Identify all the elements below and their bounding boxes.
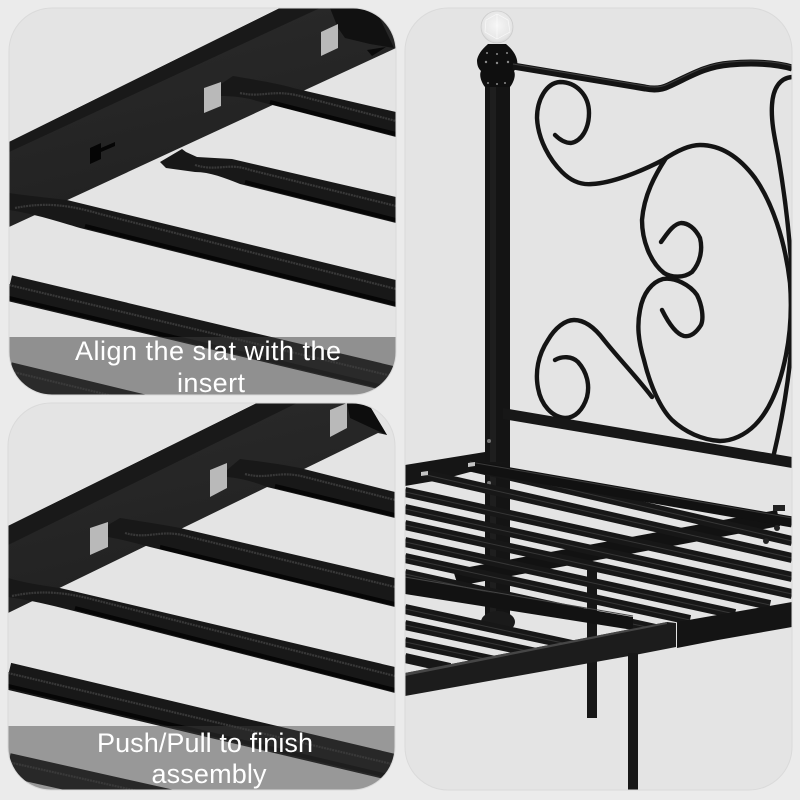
slat: lower long: [9, 285, 396, 390]
rear side rail: [470, 462, 792, 522]
slat: upper inserted: [221, 76, 396, 137]
finial knob: [477, 44, 517, 87]
T-shaped slot: [90, 142, 115, 164]
panel outline: [405, 8, 792, 790]
scroll: lower left: [537, 320, 652, 418]
slat: middle long: [9, 193, 396, 307]
scroll: upper inner: [642, 158, 701, 277]
caption: align the slat: insert: [177, 368, 245, 398]
side joint hardware: [763, 505, 785, 544]
bedpost: [481, 85, 515, 633]
scroll: top left and big outer curve: [537, 82, 791, 441]
caption: push pull: Push/Pull to finish: [97, 728, 313, 758]
insert slot: middle: [204, 82, 221, 113]
side rail beam: [9, 8, 396, 227]
front rail sleeve: [677, 602, 792, 648]
slat: free end with flat tab: [160, 149, 396, 223]
slat: top corner: [347, 403, 387, 435]
slat: top corner: [330, 8, 394, 56]
panel: push pull: [8, 403, 396, 800]
leg: rear: [587, 570, 597, 718]
slat: bottom: [10, 753, 172, 790]
headboard lower rail: [503, 408, 792, 468]
bolts on post: [487, 439, 491, 485]
insert slot: top: [330, 403, 347, 437]
front frame rail: [405, 622, 676, 696]
slat inserts: [421, 462, 475, 476]
panel: bed frame photo: [405, 8, 792, 790]
caption band: [8, 726, 395, 790]
headboard frame rail: [406, 452, 496, 486]
scroll: right vertical: [772, 77, 792, 458]
slat: second inserted: [108, 518, 395, 607]
slat: middle long: [8, 578, 395, 693]
panel: align the slat: [9, 8, 396, 420]
inner front bar: [405, 577, 633, 630]
insert slot: top: [321, 24, 338, 56]
panel outline: [9, 8, 396, 395]
slat: lower long: [8, 673, 396, 778]
slat: upper inserted: [227, 459, 395, 518]
panel outline: [8, 403, 395, 790]
mattress slats: [405, 466, 792, 668]
caption: align the slat: Align the slat with the: [75, 336, 341, 366]
center support beam: [453, 510, 780, 586]
leg: front: [628, 653, 638, 790]
crystal ball: [481, 11, 513, 43]
insert slot: middle: [210, 463, 227, 497]
caption: push pull: assembly: [152, 759, 267, 789]
side rail beam: [8, 403, 387, 613]
headboard top rail: [513, 61, 792, 89]
slat: bottom: [11, 362, 145, 394]
slat highlights: [405, 466, 792, 662]
insert slot: lower: [90, 522, 108, 555]
caption band: [9, 337, 396, 395]
